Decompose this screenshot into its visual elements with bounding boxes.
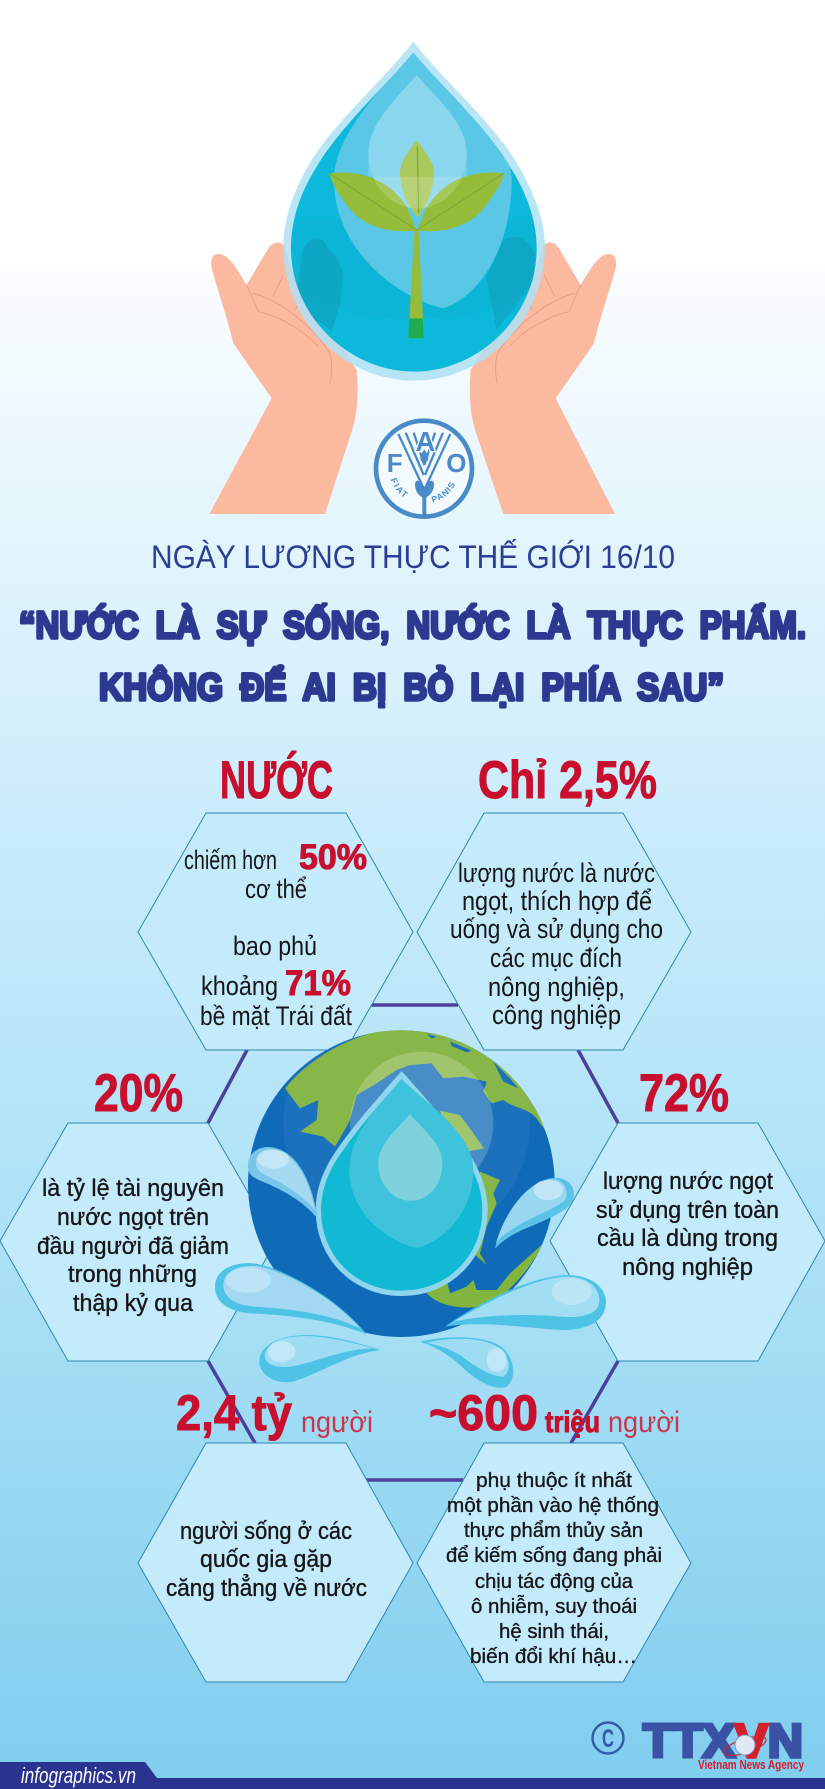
- text: body 50%: 50%: [299, 838, 367, 877]
- text: agriculture use: [596, 1168, 779, 1281]
- text: agriculture use: sử dụng trên toàn: [596, 1197, 779, 1224]
- text: surface 71%: bao phủ: [233, 931, 317, 961]
- text: aquatic food systems: một phần vào hệ thống: [447, 1494, 659, 1517]
- text: fresh water description: nông nghiệp,: [488, 972, 625, 1002]
- text: body 50%: chiếm hơn: [184, 845, 277, 875]
- text: surface 71%: [200, 931, 353, 1031]
- heading: ~600 triệu người: triệu: [545, 1406, 600, 1439]
- text: aquatic food systems: biến đổi khí hậu…: [470, 1645, 637, 1668]
- text: fresh water description: công nghiệp: [492, 1000, 621, 1030]
- text: per capita decline: thập kỷ qua: [73, 1290, 194, 1317]
- icon: splash right upper: [495, 1178, 574, 1248]
- heading: 72%: 72%: [639, 1064, 729, 1123]
- text: aquatic food systems: [446, 1469, 662, 1668]
- main title: KHÔNG ĐỂ AI BỊ BỎ LẠI PHÍA SAU”: [99, 664, 724, 709]
- text: water stress: [166, 1518, 367, 1602]
- panel: fresh water 2.5%: [417, 751, 691, 1050]
- panel: 600 million people: [417, 1385, 691, 1682]
- main title: [19, 602, 806, 709]
- logo: FAO: O: [446, 448, 466, 478]
- text: fresh water description: [450, 858, 663, 1030]
- text: fresh water description: các mục đích: [490, 943, 622, 973]
- footer band with site name: infographics.vn: [21, 1763, 136, 1788]
- text: aquatic food systems: để kiếm sống đang phải: [446, 1544, 662, 1567]
- text: aquatic food systems: chịu tác động của: [475, 1570, 634, 1593]
- logo: copyright: C: [602, 1725, 614, 1753]
- logo: FAO: PANIS: [431, 482, 454, 502]
- text: surface 71%: khoảng: [201, 971, 278, 1001]
- text: aquatic food systems: thực phẩm thủy sản: [464, 1519, 643, 1542]
- icon: splash left lower: [215, 1263, 367, 1334]
- heading: NƯỚC: NƯỚC: [220, 750, 333, 810]
- text: per capita decline: nước ngọt trên: [57, 1204, 209, 1231]
- text: fresh water description: lượng nước là nước: [458, 858, 655, 888]
- icon: splash bottom left: [259, 1335, 380, 1382]
- text: water stress: quốc gia gặp: [200, 1546, 332, 1573]
- text: agriculture use: cầu là dùng trong: [597, 1225, 778, 1252]
- heading: 2,4 tỷ người: [176, 1385, 373, 1441]
- icon: globe: [248, 1000, 557, 1337]
- heading: 20%: 20%: [94, 1064, 183, 1123]
- panel: water share: [138, 750, 413, 1050]
- logo: copyright: [592, 1722, 624, 1754]
- connector lines: [208, 1005, 618, 1480]
- text: per capita decline: là tỷ lệ tài nguyên: [42, 1175, 224, 1202]
- logo: FAO: FIAT: [390, 478, 408, 497]
- text: water stress: người sống ở các: [180, 1518, 352, 1545]
- text: aquatic food systems: ô nhiễm, suy thoái: [471, 1595, 637, 1618]
- logo: FAO: A: [415, 426, 435, 457]
- icon: splash bottom right: [420, 1337, 513, 1388]
- subtitle: NGÀY LƯƠNG THỰC THẾ GIỚI 16/10: [151, 539, 675, 575]
- panel: 72%: [550, 1064, 825, 1361]
- panel: 2.4 billion people: [138, 1385, 413, 1682]
- panel: 20%: [0, 1064, 276, 1361]
- text: per capita decline: đầu người đã giảm: [37, 1233, 229, 1260]
- text: agriculture use: nông nghiệp: [622, 1254, 753, 1281]
- icon: splash right lower: [445, 1275, 606, 1330]
- heading: Chỉ 2,5%: Chỉ 2,5%: [478, 751, 657, 810]
- logo: FAO: [374, 418, 474, 519]
- footer band with site name: [0, 1762, 825, 1789]
- text: fresh water description: uống và sử dụng cho: [450, 914, 663, 944]
- text: surface 71%: bề mặt Trái đất: [200, 1001, 353, 1031]
- icon: center water drop: [318, 1075, 485, 1293]
- heading: 2,4 tỷ người: 2,4 tỷ: [176, 1385, 292, 1441]
- text: per capita decline: [37, 1175, 229, 1317]
- text: body 50%: [184, 838, 367, 904]
- text: agriculture use: lượng nước ngọt: [603, 1168, 773, 1195]
- icon: water drop: [283, 42, 545, 381]
- heading: ~600 triệu người: người: [608, 1406, 680, 1439]
- icon: plant: [329, 140, 504, 338]
- heading: ~600 triệu người: ~600: [429, 1385, 538, 1441]
- text: per capita decline: trong những: [68, 1261, 197, 1288]
- text: fresh water description: ngọt, thích hợp để: [462, 886, 652, 916]
- icon: left hand: [209, 243, 358, 514]
- icon: right hand: [470, 243, 616, 514]
- text: aquatic food systems: hệ sinh thái,: [499, 1620, 609, 1643]
- text: surface 71%: 71%: [285, 964, 351, 1003]
- text: water stress: căng thẳng về nước: [166, 1573, 367, 1602]
- text: aquatic food systems: phụ thuộc ít nhất: [476, 1469, 632, 1492]
- illustration: hands holding water drop with plant: [209, 42, 616, 514]
- icon: splash left upper: [248, 1147, 317, 1218]
- logo: FAO: F: [387, 448, 403, 478]
- heading: ~600 triệu người: [429, 1385, 680, 1441]
- logo: TTXVN: TTXVN: [643, 1714, 803, 1767]
- text: body 50%: cơ thể: [245, 874, 307, 904]
- heading: 2,4 tỷ người: người: [301, 1406, 373, 1439]
- illustration: globe with water drop and splashes: [215, 1000, 606, 1388]
